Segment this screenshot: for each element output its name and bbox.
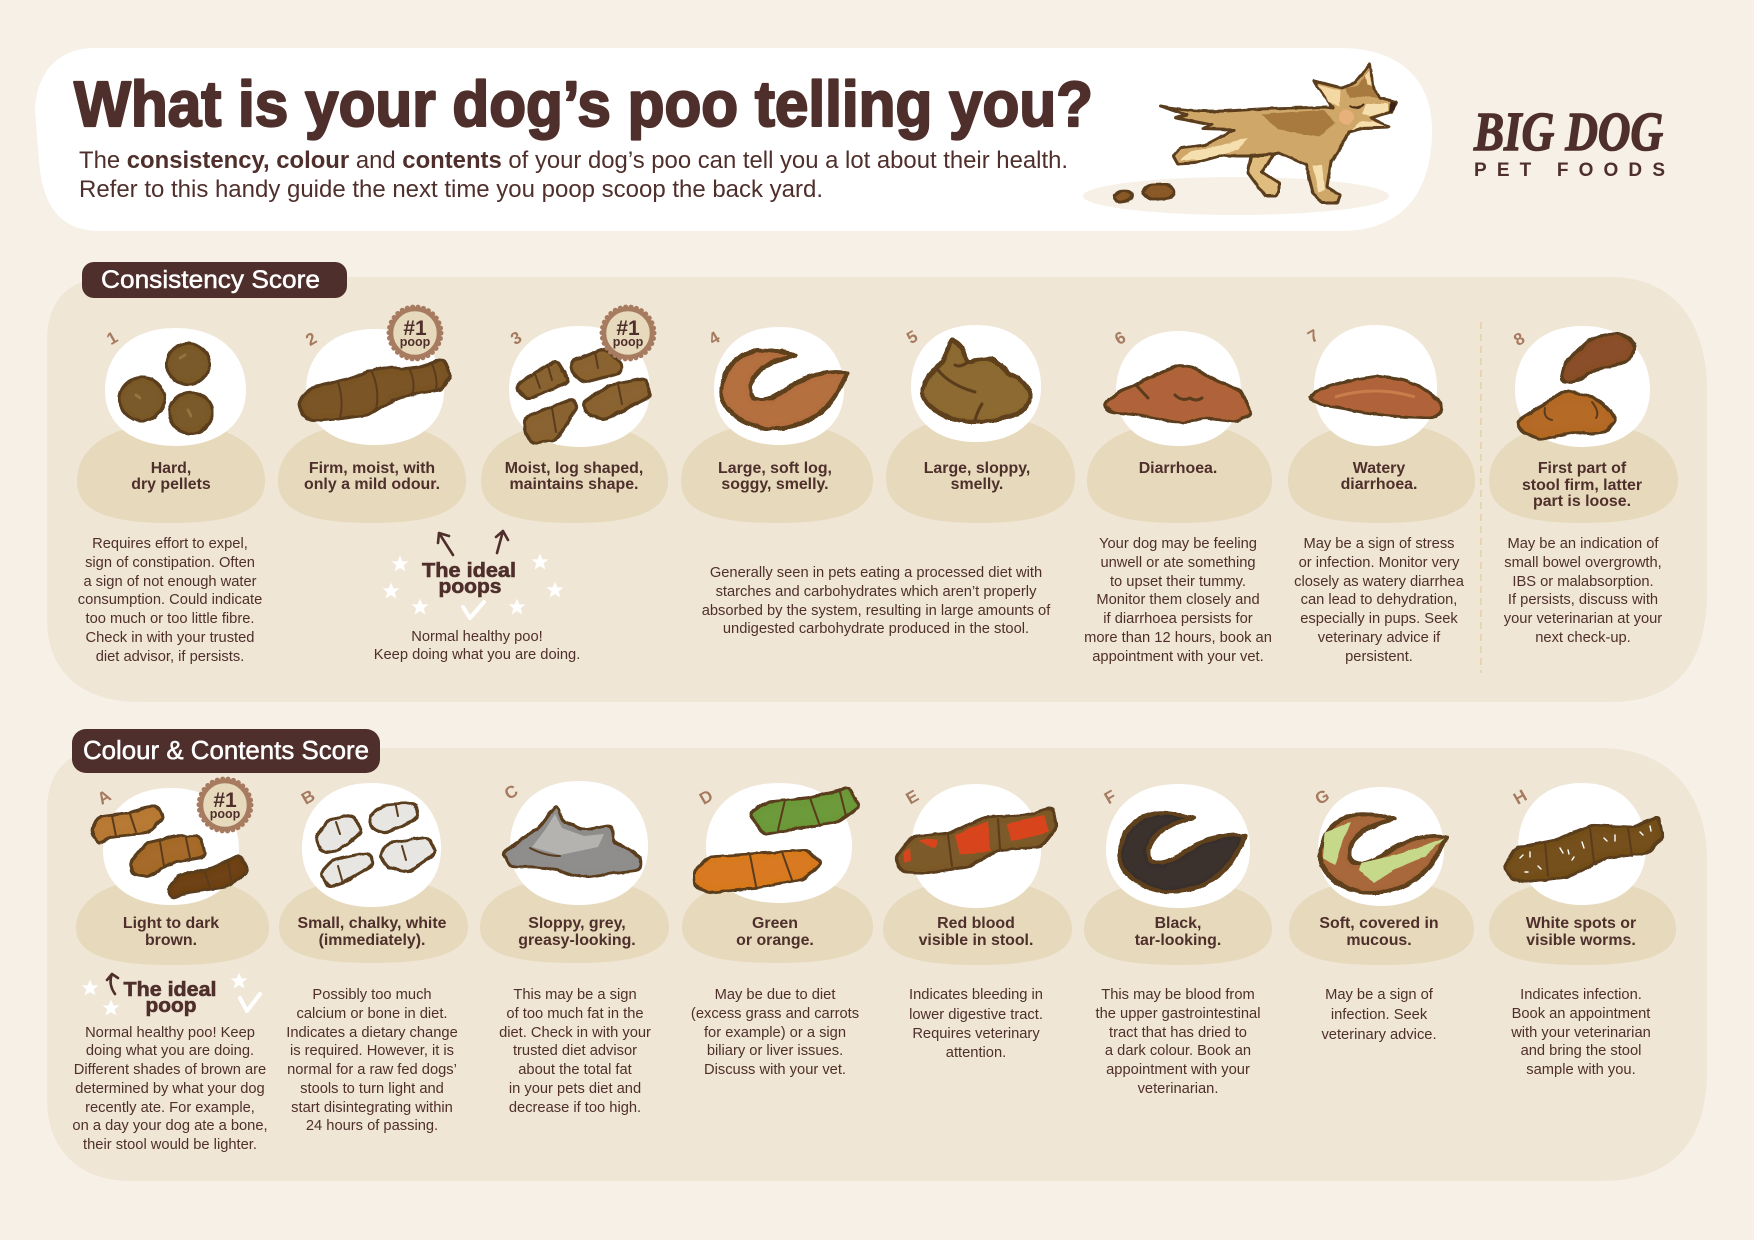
description: lower digestive tract. <box>909 1007 1043 1023</box>
caption: visible in stool. <box>919 932 1033 949</box>
panel: colour and contents score <box>47 729 1707 1181</box>
description: normal for a raw fed dogs’ <box>287 1062 457 1078</box>
callout: the ideal poops <box>374 531 580 663</box>
badge: #1 poop: poop <box>400 335 431 349</box>
description: the upper gastrointestinal <box>1096 1006 1260 1022</box>
number F: F <box>1101 786 1119 808</box>
description: too much or too little fibre. <box>86 611 254 627</box>
card 2: firm moist <box>278 307 466 523</box>
card 5: large sloppy <box>886 325 1075 523</box>
description: their stool would be lighter. <box>83 1137 257 1153</box>
description: biliary or liver issues. <box>707 1043 843 1059</box>
caption: part is loose. <box>1533 493 1631 510</box>
caption: Hard, <box>151 460 191 477</box>
description: (excess grass and carrots <box>691 1006 859 1022</box>
description: determined by what your dog <box>75 1081 265 1097</box>
icon: chalky chunks <box>315 803 437 888</box>
description: trusted diet advisor <box>513 1043 637 1059</box>
caption: visible worms. <box>1526 932 1636 949</box>
caption: dry pellets <box>131 476 211 493</box>
description: This may be a sign <box>513 987 637 1003</box>
caption: Moist, log shaped, <box>505 460 643 477</box>
description: Indicates infection. <box>1520 987 1642 1003</box>
panel: consistency score <box>47 262 1707 702</box>
card G: covered in mucous <box>1289 786 1474 1043</box>
description: May be a sign of <box>1325 987 1434 1003</box>
description: May be an indication of <box>1507 536 1659 552</box>
caption: brown. <box>145 932 197 949</box>
intro text: Refer to this handy guide the next time you poop scoop the back yard. <box>79 176 823 203</box>
description: IBS or malabsorption. <box>1512 574 1654 590</box>
caption: Light to dark <box>123 915 219 932</box>
description: May be due to diet <box>715 987 835 1003</box>
caption: greasy-looking. <box>518 932 636 949</box>
ideal label: The ideal <box>422 560 516 582</box>
description: doing what you are doing. <box>86 1043 254 1059</box>
heading tab: colour and contents score: Colour & Contents Score <box>83 735 369 765</box>
badge: #1 poop <box>602 307 654 359</box>
description: next check-up. <box>1535 630 1631 646</box>
description: 24 hours of passing. <box>306 1118 438 1134</box>
number 2: 2 <box>302 329 320 350</box>
badge: #1 poop: #1 <box>213 789 237 812</box>
description: May be a sign of stress <box>1303 536 1455 552</box>
card D: green or orange <box>682 783 873 1078</box>
callout: the ideal poop: The ideal <box>124 979 216 1001</box>
badge: #1 poop: poop <box>613 335 644 349</box>
caption: First part of <box>1538 460 1627 477</box>
description shared by cards 4 and 5: undigested carbohydrate produced in the stool. <box>723 621 1029 637</box>
description: Indicates bleeding in <box>909 987 1043 1003</box>
callout: the ideal poop: poop <box>146 995 196 1017</box>
description: a sign of not enough water <box>83 574 257 590</box>
number E: E <box>903 786 922 808</box>
caption: Large, soft log, <box>718 460 832 477</box>
description: appointment with your vet. <box>1092 649 1264 665</box>
badge: #1 poop: #1 <box>403 317 427 340</box>
badge: #1 poop: #1 <box>616 317 640 340</box>
icon: diarrhoea <box>1103 365 1252 422</box>
icon: log chunks <box>514 348 651 444</box>
caption: Green <box>752 915 798 932</box>
badge: #1 poop <box>389 307 441 359</box>
icon: pellets <box>119 343 213 434</box>
caption: Sloppy, grey, <box>528 915 626 932</box>
caption: only a mild odour. <box>304 476 440 493</box>
number B: B <box>298 786 318 809</box>
description: can lead to dehydration, <box>1301 592 1457 608</box>
caption: diarrhoea. <box>1341 476 1417 493</box>
caption: stool firm, latter <box>1522 477 1642 494</box>
description: persistent. <box>1345 649 1413 665</box>
number 6: 6 <box>1111 328 1129 349</box>
description: If persists, discuss with <box>1508 592 1658 608</box>
description: Different shades of brown are <box>74 1062 266 1078</box>
logo: Big Dog Pet Foods: BIG DOG <box>1473 101 1663 162</box>
description: infection. Seek <box>1331 1007 1428 1023</box>
logo: Big Dog Pet Foods: PET FOODS <box>1474 160 1665 181</box>
caption: maintains shape. <box>510 476 638 493</box>
icon: watery <box>1307 376 1442 418</box>
description: tract that has dried to <box>1109 1025 1247 1041</box>
number 1: 1 <box>103 328 121 349</box>
description: appointment with your <box>1106 1062 1250 1078</box>
caption: Large, sloppy, <box>924 460 1030 477</box>
description: about the total fat <box>518 1062 632 1078</box>
description: attention. <box>946 1045 1006 1061</box>
description: a dark colour. Book an <box>1105 1043 1251 1059</box>
card A: light to dark brown <box>72 779 269 1153</box>
header panel <box>35 48 1432 231</box>
description: Requires veterinary <box>912 1026 1040 1042</box>
number 5: 5 <box>903 327 921 348</box>
description: if diarrhoea persists for <box>1103 611 1253 627</box>
description: Possibly too much <box>312 987 432 1003</box>
description: Indicates a dietary change <box>286 1025 458 1041</box>
description: veterinary advice. <box>1321 1027 1437 1043</box>
caption: Black, <box>1155 915 1201 932</box>
caption: mucous. <box>1346 932 1412 949</box>
card 1: hard dry pellets <box>77 328 265 665</box>
caption: Watery <box>1353 460 1405 477</box>
description: small bowel overgrowth, <box>1504 555 1662 571</box>
description: Your dog may be feeling <box>1099 536 1257 552</box>
badge: #1 poop: poop <box>210 807 241 821</box>
card H: white spots or worms <box>1489 783 1676 1078</box>
description: calcium or bone in diet. <box>296 1006 448 1022</box>
description: or infection. Monitor very <box>1299 555 1460 571</box>
description: with your veterinarian <box>1510 1025 1651 1041</box>
description: Discuss with your vet. <box>704 1062 846 1078</box>
description: Check in with your trusted <box>86 630 254 646</box>
description: in your pets diet and <box>509 1081 641 1097</box>
icon: log with worms <box>1503 816 1663 882</box>
description: This may be blood from <box>1101 987 1255 1003</box>
divider before 8 <box>1480 322 1482 673</box>
card B: small chalky white <box>279 783 468 1134</box>
icon: grey heap <box>502 803 641 877</box>
title: What is your dog’s poo telling you? <box>74 68 1093 140</box>
caption: Diarrhoea. <box>1139 460 1217 477</box>
logo: Big Dog Pet Foods <box>1473 101 1665 181</box>
card E: red blood <box>883 784 1072 1061</box>
card 3: moist log shaped <box>481 307 668 523</box>
caption: soggy, smelly. <box>721 476 829 493</box>
number 3: 3 <box>507 328 525 349</box>
icon: firm and loose <box>1516 333 1636 440</box>
description: Normal healthy poo! <box>411 629 543 645</box>
number D: D <box>696 786 716 809</box>
caption: White spots or <box>1526 915 1636 932</box>
description: diet advisor, if persists. <box>96 649 244 665</box>
caption: Soft, covered in <box>1319 915 1439 932</box>
number H: H <box>1510 786 1530 809</box>
icon: black stool <box>1118 812 1248 893</box>
icon: sloppy heap <box>921 338 1032 423</box>
number 7: 7 <box>1304 326 1322 347</box>
description: Monitor them closely and <box>1096 592 1260 608</box>
description: Keep doing what you are doing. <box>374 647 580 663</box>
card 8: first part firm latter loose <box>1489 326 1678 646</box>
description: decrease if too high. <box>509 1100 641 1116</box>
card 7: watery diarrhoea <box>1288 325 1475 665</box>
arrows <box>438 531 508 555</box>
caption: Firm, moist, with <box>309 460 435 477</box>
description: and bring the stool <box>1521 1043 1641 1059</box>
description: on a day your dog ate a bone, <box>72 1118 268 1134</box>
description: of too much fat in the <box>506 1006 644 1022</box>
caption: tar-looking. <box>1135 932 1221 949</box>
description: sign of constipation. Often <box>85 555 255 571</box>
description: closely as watery diarrhea <box>1294 574 1465 590</box>
description: Book an appointment <box>1512 1006 1650 1022</box>
card F: black tar <box>1084 784 1272 1097</box>
description: stools to turn light and <box>300 1081 444 1097</box>
description shared by cards 4 and 5: Generally seen in pets eating a processed diet with <box>710 565 1042 581</box>
caption: (immediately). <box>319 932 425 949</box>
icon: three logs <box>91 804 249 899</box>
icon: soft log <box>720 349 850 430</box>
stars and check <box>382 554 564 618</box>
heading tab: colour and contents score <box>72 729 380 773</box>
description: to upset their tummy. <box>1110 574 1246 590</box>
description shared by cards 4 and 5: absorbed by the system, resulting in large amounts of <box>702 603 1051 619</box>
heading tab: consistency score: Consistency Score <box>101 266 320 294</box>
icon: green and orange logs <box>694 787 860 893</box>
number A: A <box>94 786 114 809</box>
description: Requires effort to expel, <box>92 536 248 552</box>
description: veterinarian. <box>1138 1081 1218 1097</box>
description: recently ate. For example, <box>85 1100 255 1116</box>
icon: mucous stool <box>1319 813 1449 894</box>
caption: Small, chalky, white <box>298 915 447 932</box>
ideal label: poops <box>438 576 502 598</box>
number C: C <box>501 781 521 804</box>
card 4: large soft log <box>681 327 873 523</box>
caption: or orange. <box>736 932 814 949</box>
description: veterinary advice if <box>1318 630 1441 646</box>
description: diet. Check in with your <box>499 1025 651 1041</box>
description: is required. However, it is <box>290 1043 454 1059</box>
description: Normal healthy poo! Keep <box>85 1025 255 1041</box>
intro text: The consistency, colour and contents of your dog’s poo can tell you a lot about their health. <box>79 147 1071 174</box>
description: sample with you. <box>1526 1062 1636 1078</box>
description shared by cards 4 and 5: starches and carbohydrates which aren’t properly <box>716 584 1037 600</box>
caption: Red blood <box>937 915 1015 932</box>
description: more than 12 hours, book an <box>1084 630 1272 646</box>
description: especially in pups. Seek <box>1300 611 1458 627</box>
number 8: 8 <box>1510 329 1528 350</box>
icon: firm log <box>298 358 451 421</box>
callout: the ideal poop <box>82 972 260 1017</box>
heading tab: consistency score <box>82 262 347 298</box>
card C: sloppy grey <box>480 781 669 1116</box>
icon: blood streaked log <box>895 807 1057 873</box>
number G: G <box>1312 786 1333 809</box>
description: consumption. Could indicate <box>78 592 262 608</box>
description: unwell or ate something <box>1100 555 1256 571</box>
caption: smelly. <box>951 476 1003 493</box>
card 6: diarrhoea <box>1084 328 1272 665</box>
description: for example) or a sign <box>704 1025 846 1041</box>
description: start disintegrating within <box>291 1100 453 1116</box>
illustration: dog <box>1083 64 1396 215</box>
number 4: 4 <box>705 327 724 349</box>
description: your veterinarian at your <box>1504 611 1662 627</box>
badge: #1 poop <box>199 779 251 831</box>
